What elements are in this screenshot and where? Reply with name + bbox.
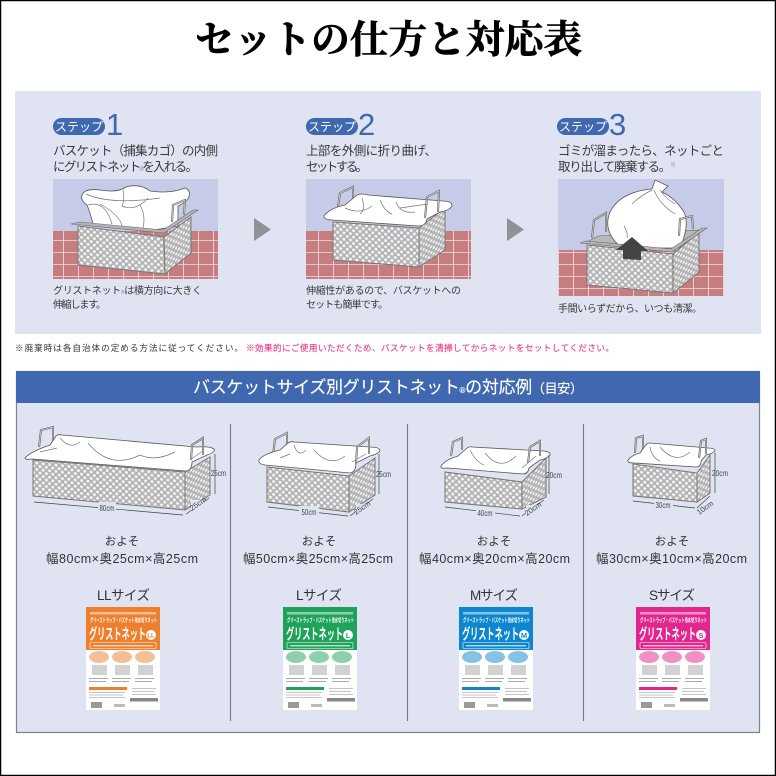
S dimensions: [596, 535, 747, 566]
LL package: グリストネット: [89, 625, 146, 643]
LL dimensions: 幅80cm×奥25cm×高25cm: [46, 551, 198, 566]
basket LL: 80cm: [100, 504, 115, 513]
step 1: 伸縮します。: [53, 298, 106, 311]
basket L: [259, 433, 391, 517]
S package: [636, 607, 710, 710]
S size label: Sサイズ: [649, 588, 695, 603]
step 3 text: ゴミが溜まったら、ネットごと: [558, 143, 724, 158]
S package: S: [698, 631, 704, 640]
title: セットの仕方と対応表: [195, 19, 582, 62]
step 1 badge: [53, 107, 123, 142]
step 1 badge: 1: [106, 107, 123, 142]
M package: M: [521, 631, 527, 640]
step 1: [53, 107, 218, 311]
step 3 illustration: [558, 179, 724, 296]
basket M: 20cm: [546, 471, 562, 480]
column: L: [243, 433, 393, 710]
S dimensions: 幅30cm×奥10cm×高20cm: [596, 551, 747, 566]
basket S: [628, 436, 728, 517]
step 2 text: 上部を外側に折り曲げ、: [306, 143, 437, 158]
M package: グリストネット: [462, 625, 519, 643]
step 3 caption: 手間いらずだから、いつも清潔。: [558, 302, 702, 315]
step 2 illustration: [306, 179, 471, 279]
arrow 2: [507, 218, 524, 241]
step 2: [306, 107, 471, 311]
S package: グリストネット: [639, 625, 696, 643]
basket S: 30cm: [656, 501, 671, 510]
step 2: セットする。: [306, 160, 368, 174]
M size label: Mサイズ: [470, 588, 518, 603]
LL package: [86, 607, 160, 710]
step 1 text: バスケット（捕集カゴ）の内側: [53, 143, 218, 158]
M dimensions: [419, 535, 570, 566]
L package: グリストネット: [286, 625, 343, 643]
arrow 1: [254, 218, 271, 241]
step 1 illustration: [53, 179, 218, 279]
step 2 caption: 伸縮性があるので、バスケットへの: [306, 284, 461, 297]
basket L: 25cm: [352, 499, 372, 517]
table header: バスケットサイズ別グリストネット®の対応例（目安）: [193, 378, 583, 397]
step 3: [557, 107, 724, 315]
LL size label: LLサイズ: [97, 588, 150, 603]
LL dimensions: [46, 535, 198, 566]
step 1 badge: ステップ: [55, 120, 103, 134]
LL dimensions: およそ: [105, 535, 139, 548]
S package: グリーストラップ・バスケット用水切りネット: [640, 616, 707, 624]
L dimensions: およそ: [302, 535, 336, 548]
step 3 badge: ステップ: [559, 120, 607, 134]
basket LL: 25cm: [211, 469, 226, 478]
basket LL: 25cm: [188, 495, 208, 513]
step 3: 取り出して廃棄する。: [558, 160, 671, 174]
panel: size table: [16, 371, 760, 732]
basket S: 10cm: [695, 499, 715, 517]
step 3 badge: [557, 107, 626, 142]
step 1 caption: グリストネット®は横方向に大きく: [53, 284, 202, 297]
panel: steps: [15, 91, 761, 334]
M package: [459, 607, 533, 710]
L package: L: [346, 631, 351, 640]
step 1: にグリストネット®を入れる。: [53, 160, 198, 174]
L dimensions: [243, 535, 393, 566]
LL package: LL: [147, 634, 155, 640]
L package: [283, 607, 357, 710]
basket M: 20cm: [523, 500, 543, 518]
basket M: [441, 438, 562, 518]
icon: up arrow: [616, 237, 648, 260]
L package: グリーストラップ・バスケット用水切りネット: [287, 616, 354, 624]
basket M: 40cm: [478, 509, 493, 518]
basket L: 50cm: [302, 508, 317, 517]
basket L: 25cm: [376, 470, 391, 479]
step 3 badge: 3: [609, 107, 626, 142]
M dimensions: およそ: [477, 535, 511, 548]
step 2 badge: ステップ: [308, 120, 356, 134]
column: S: [596, 436, 747, 710]
M dimensions: 幅40cm×奥20cm×高20cm: [419, 551, 570, 566]
LL package: グリーストラップ・バスケット用水切りネット: [90, 616, 157, 624]
table header: [16, 371, 760, 403]
L size label: Lサイズ: [296, 588, 342, 603]
step 2 badge: 2: [358, 107, 375, 142]
step 2 badge: [306, 107, 375, 142]
S dimensions: およそ: [655, 535, 689, 548]
footnote: ※効果的にご使用いただくため、バスケットを清掃してからネットをセットしてください。: [246, 342, 614, 353]
footnote: ※廃棄時は各自治体の定める方法に従ってください。: [15, 342, 243, 353]
M package: グリーストラップ・バスケット用水切りネット: [463, 616, 530, 624]
basket LL: [25, 427, 226, 515]
L dimensions: 幅50cm×奥25cm×高25cm: [243, 551, 393, 566]
step 3: ※: [670, 162, 676, 169]
column: LL: [25, 427, 226, 710]
step 2: セットも簡単です。: [306, 298, 388, 311]
footnote: [15, 342, 614, 353]
column: M: [419, 438, 570, 710]
basket S: 20cm: [712, 469, 728, 478]
